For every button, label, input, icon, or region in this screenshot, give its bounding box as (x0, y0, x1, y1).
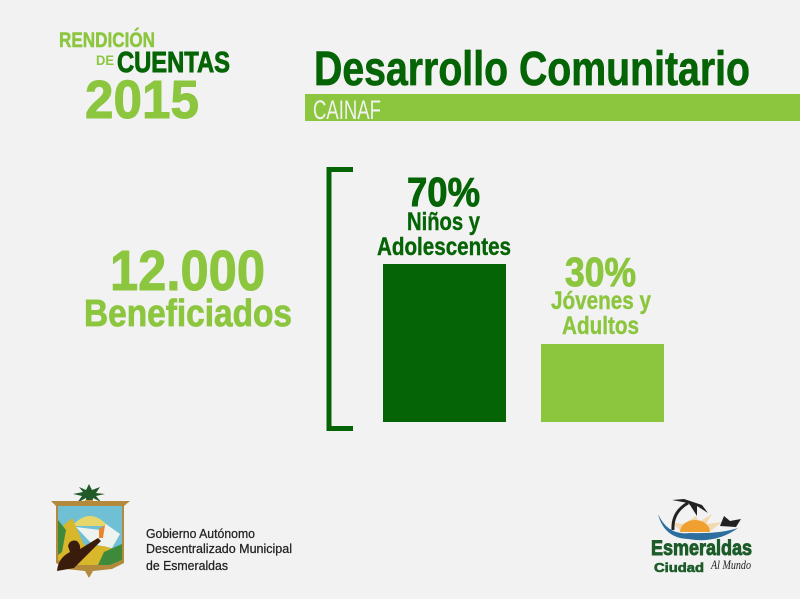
text: institution name: Gobierno Autónomo (146, 527, 255, 541)
label: 30% Jóvenes y Adultos: 30% (565, 249, 636, 295)
label: 70% Niños y Adolescentes (377, 169, 511, 261)
subtitle band: CAINAF (305, 94, 800, 125)
logo: Rendición de Cuentas 2015: RENDICIÓN (59, 28, 155, 52)
logo: Rendición de Cuentas 2015 (59, 28, 230, 130)
logo: Esmeraldas Ciudad Al Mundo: Ciudad (654, 560, 704, 575)
logo: Rendición de Cuentas 2015: CUENTAS (117, 47, 230, 79)
label: 70% Niños y Adolescentes: Niños y (407, 208, 480, 236)
text: institution name: de Esmeraldas (146, 559, 228, 573)
text: institution name (146, 527, 292, 573)
logo: Esmeraldas Ciudad Al Mundo: Esmeraldas (651, 537, 752, 560)
bracket (329, 170, 353, 428)
logo: Esmeraldas Ciudad Al Mundo (651, 499, 752, 575)
total beneficiaries: 12.000 (110, 239, 265, 303)
label: 70% Niños y Adolescentes: Adolescentes (377, 233, 511, 261)
logo: Esmeraldas Ciudad Al Mundo: Al Mundo (710, 557, 751, 572)
total beneficiaries (84, 239, 292, 335)
logo: Rendición de Cuentas 2015: DE (96, 52, 114, 68)
bar chart (377, 169, 664, 422)
subtitle band: CAINAF: CAINAF (313, 95, 381, 125)
text: institution name: Descentralizado Municipal (146, 542, 292, 556)
label: 30% Jóvenes y Adultos: Adultos (562, 312, 639, 340)
label: 70% Niños y Adolescentes: 70% (407, 169, 480, 215)
label: 30% Jóvenes y Adultos: Jóvenes y (551, 287, 651, 315)
icon: coat of arms (51, 484, 130, 578)
bar: 70% (383, 264, 506, 422)
label: 30% Jóvenes y Adultos (551, 249, 651, 340)
total beneficiaries: Beneficiados (84, 293, 292, 335)
logo: Rendición de Cuentas 2015: 2015 (85, 70, 199, 130)
bar: 30% (541, 344, 664, 422)
